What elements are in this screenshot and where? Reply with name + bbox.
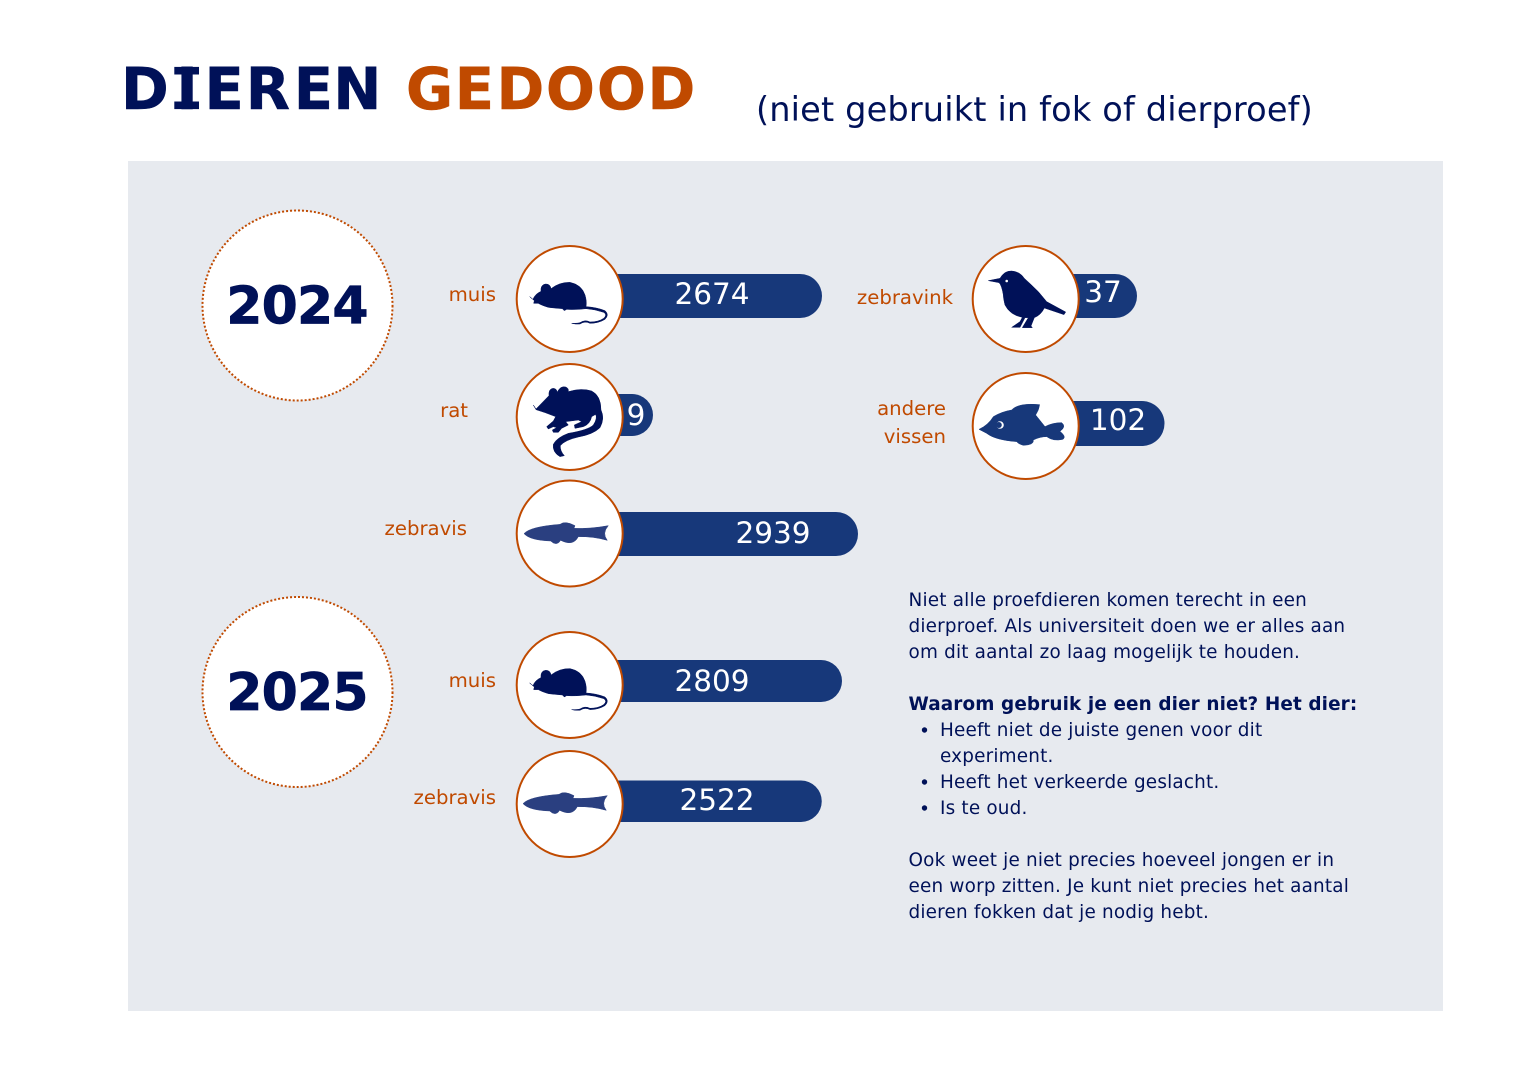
year badge 2025: 2025	[226, 663, 368, 723]
row: zebravis 2025: 2522	[679, 783, 755, 817]
text block: toelichting: dieren fokken dat je nodig hebt.	[908, 902, 1209, 923]
row: andere vissen 2024	[877, 373, 1164, 479]
text block: toelichting: Niet alle proefdieren komen terecht in een	[908, 590, 1307, 611]
text block: toelichting: experiment.	[940, 746, 1054, 767]
row: rat 2024: rat	[440, 399, 468, 422]
row: zebravis 2025: zebravis	[414, 786, 496, 809]
text block: toelichting: Waarom gebruik je een dier niet? Het dier:	[908, 694, 1357, 715]
row: andere vissen 2024: 102	[1090, 403, 1146, 437]
row: muis 2025: muis	[449, 669, 496, 692]
text block: toelichting: Is te oud.	[940, 798, 1028, 819]
text block: toelichting: Heeft het verkeerde geslacht.	[940, 772, 1219, 793]
text block: toelichting: een worp zitten. Je kunt niet precies het aantal	[908, 876, 1349, 897]
text block: toelichting: Ook weet je niet precies hoeveel jongen er in	[908, 850, 1334, 871]
row: muis 2024: muis	[449, 283, 496, 306]
row: zebravis 2025	[414, 751, 822, 857]
row: muis 2025	[449, 632, 842, 738]
row: zebravink 2024: 37	[1084, 275, 1122, 309]
row: zebravink 2024	[857, 246, 1137, 352]
row: zebravink 2024: zebravink	[857, 286, 954, 309]
row: andere vissen 2024: andere	[877, 397, 946, 420]
row: zebravis 2024: 2939	[735, 516, 811, 550]
row: muis 2024: 2674	[674, 277, 750, 311]
title: GEDOOD	[406, 56, 695, 123]
row: zebravis 2024	[385, 480, 858, 586]
row: zebravis 2024: zebravis	[385, 517, 467, 540]
year badge 2024: 2024	[226, 276, 368, 336]
year badge 2025	[202, 597, 392, 787]
title: DIEREN	[121, 56, 381, 123]
text block: toelichting: dierproef. Als universiteit doen we er alles aan	[908, 616, 1345, 637]
text block: toelichting: om dit aantal zo laag mogelijk te houden.	[908, 642, 1300, 663]
row: muis 2025: 2809	[674, 664, 750, 698]
subtitle: (niet gebruikt in fok of dierproef)	[756, 90, 1313, 129]
row: rat 2024	[440, 364, 653, 470]
panel: background	[128, 161, 1443, 1011]
text block: toelichting	[908, 590, 1357, 923]
year badge 2024	[202, 210, 392, 400]
row: rat 2024: 9	[627, 398, 645, 432]
text block: toelichting: Heeft niet de juiste genen voor dit	[940, 720, 1262, 741]
row: andere vissen 2024: vissen	[884, 425, 946, 448]
title	[121, 56, 695, 123]
row: muis 2024	[449, 246, 822, 352]
